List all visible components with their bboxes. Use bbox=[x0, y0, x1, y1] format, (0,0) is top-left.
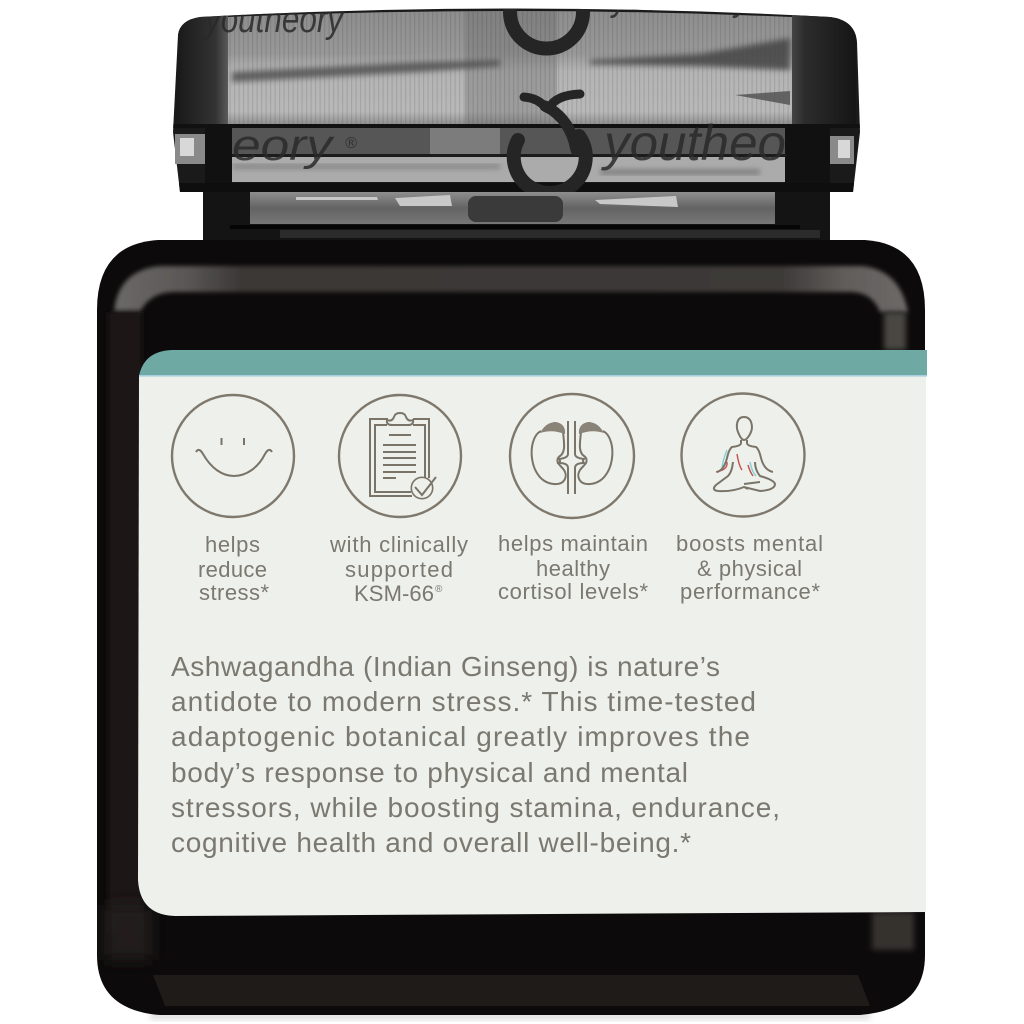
caption: boosts mental and physical performance bbox=[676, 531, 823, 604]
teal label band bbox=[139, 350, 927, 376]
caption: boosts mental and physical performance: & physical bbox=[697, 556, 802, 581]
caption: helps reduce stress: stress* bbox=[199, 580, 269, 605]
caption: helps reduce stress: helps bbox=[205, 532, 260, 557]
jar neck bbox=[203, 186, 830, 250]
caption: helps maintain healthy cortisol levels bbox=[498, 531, 648, 604]
icon: meditating figure bbox=[682, 394, 804, 516]
cap brand text: ® bbox=[345, 135, 357, 152]
icon: kidneys bbox=[510, 394, 634, 518]
cap logo marks bbox=[510, 12, 586, 193]
ground shadow bbox=[150, 1012, 870, 1020]
cap glass edges bbox=[175, 134, 854, 164]
label body bbox=[138, 376, 926, 916]
caption: helps maintain healthy cortisol levels: helps maintain bbox=[498, 531, 648, 556]
cap brand text: youtheory bbox=[203, 0, 345, 41]
cap brand text bbox=[203, 0, 786, 171]
body paragraph: body’s response to physical and mental bbox=[171, 757, 688, 788]
body paragraph: antidote to modern stress.* This time-tested bbox=[171, 686, 756, 717]
icon: smiley bbox=[172, 395, 294, 517]
jar cap bbox=[173, 0, 863, 193]
body paragraph: stressors, while boosting stamina, endurance, bbox=[171, 792, 780, 823]
cap brand text: eory bbox=[232, 121, 336, 170]
caption: boosts mental and physical performance: boosts mental bbox=[676, 531, 823, 556]
caption: with clinically supported KSM-66: with clinically bbox=[329, 532, 468, 557]
caption: with clinically supported KSM-66 bbox=[329, 532, 468, 606]
caption: helps reduce stress bbox=[198, 532, 269, 605]
body paragraph bbox=[171, 651, 780, 858]
caption: with clinically supported KSM-66: ® bbox=[435, 584, 443, 595]
body paragraph: adaptogenic botanical greatly improves the bbox=[171, 721, 750, 752]
caption: boosts mental and physical performance: performance* bbox=[680, 579, 820, 604]
body paragraph: Ashwagandha (Indian Ginseng) is nature’s bbox=[171, 651, 720, 682]
cap brand text: youtheo bbox=[601, 115, 786, 171]
label panel bbox=[138, 350, 927, 916]
body paragraph: cognitive health and overall well-being.* bbox=[171, 827, 691, 858]
jar body bbox=[97, 240, 925, 1015]
caption: with clinically supported KSM-66: KSM-66 bbox=[354, 581, 434, 606]
caption: with clinically supported KSM-66: supported bbox=[345, 557, 453, 582]
caption: helps maintain healthy cortisol levels: cortisol levels* bbox=[498, 579, 648, 604]
caption: helps maintain healthy cortisol levels: healthy bbox=[536, 556, 610, 581]
icon: clipboard bbox=[339, 395, 461, 517]
caption: helps reduce stress: reduce bbox=[198, 557, 267, 582]
